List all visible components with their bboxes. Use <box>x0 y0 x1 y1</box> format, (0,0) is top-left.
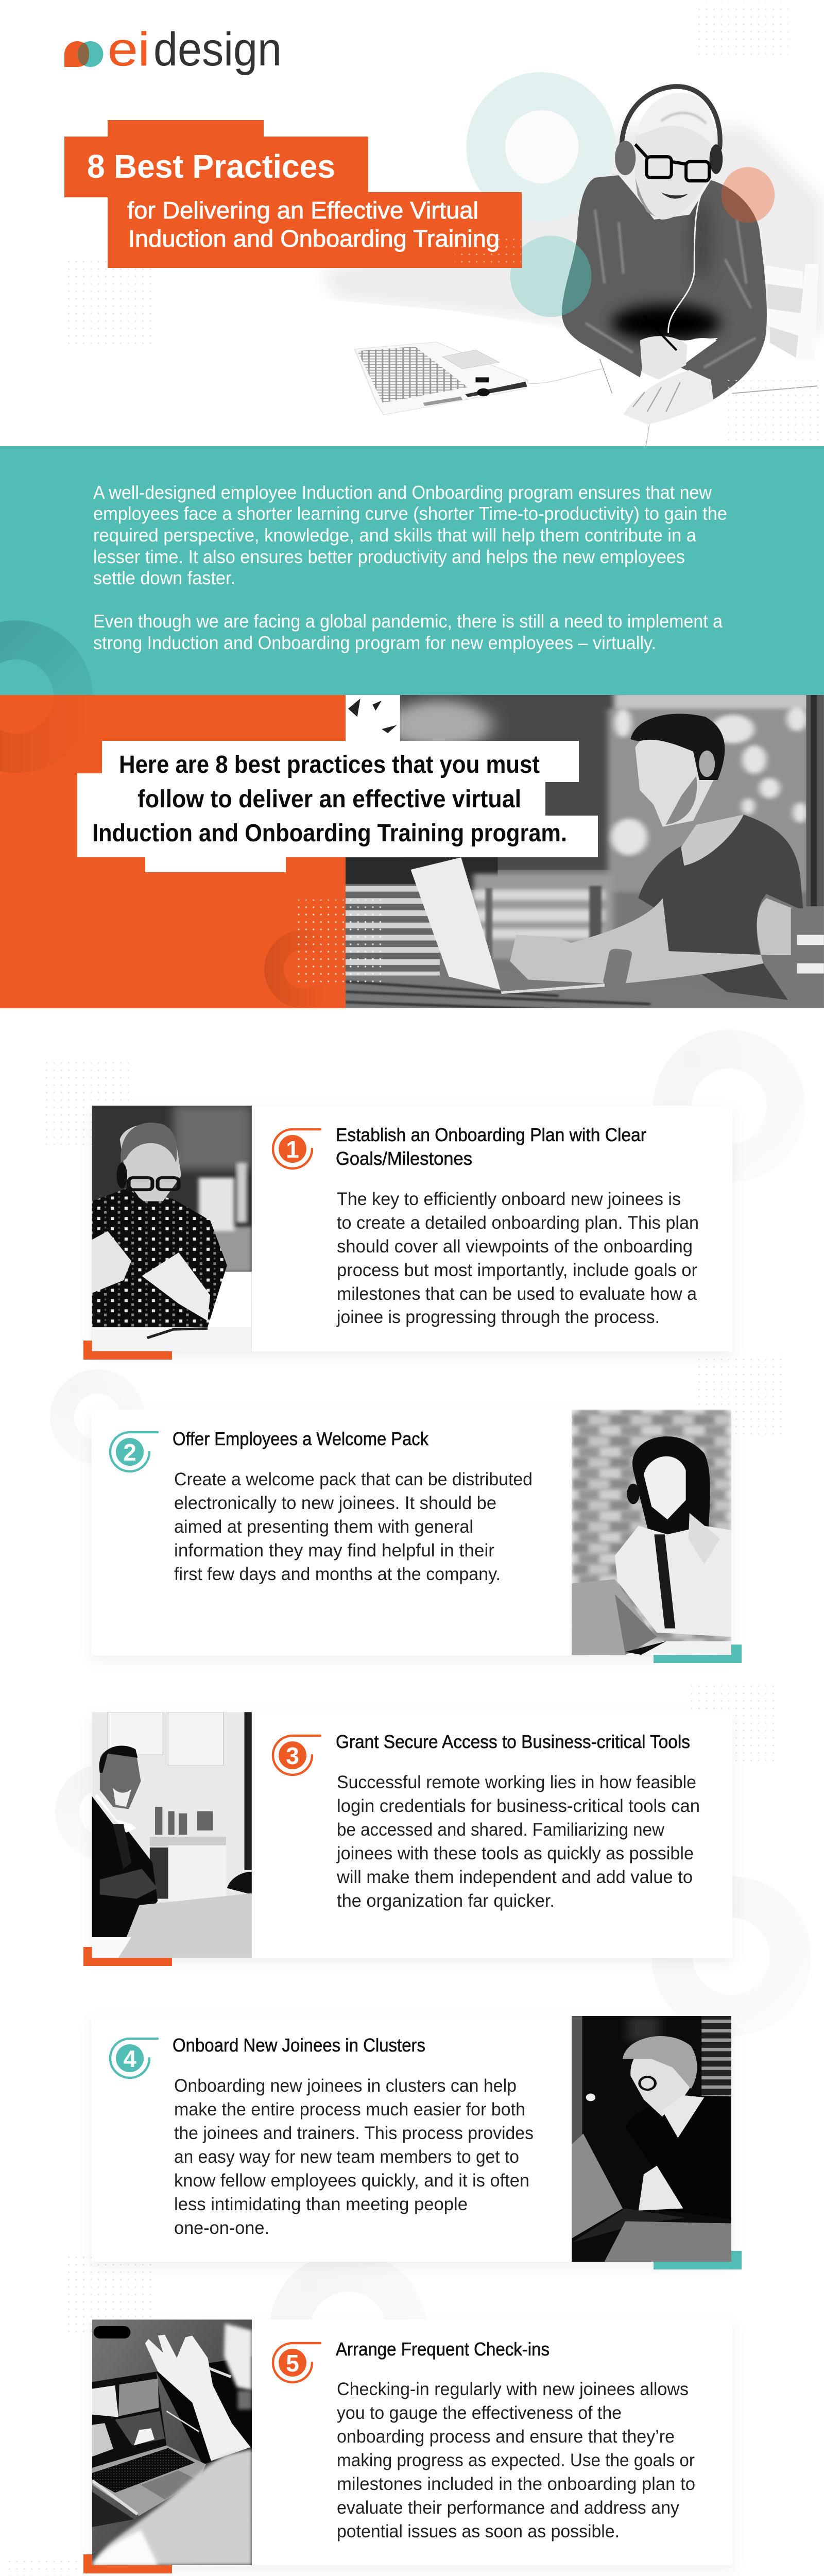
practice 4 text <box>174 2076 534 2238</box>
hero photo: woman with headset at laptop <box>288 72 824 448</box>
practice 5 text: onboarding process and ensure that they’re <box>337 2427 675 2447</box>
panel: practice 3 <box>83 1712 732 1966</box>
practice 2 badge: 2 <box>123 1439 136 1466</box>
intro paragraph 2: strong Induction and Onboarding program for new employees – virtually. <box>93 632 656 653</box>
panel: practice 2 <box>92 1409 742 1663</box>
practice 3 text: will make them independent and add value to <box>336 1867 693 1887</box>
logo: eidesign: ei <box>108 23 150 76</box>
practice 4 text: know fellow employees quickly, and it is often <box>174 2171 529 2191</box>
practice 1 text <box>336 1189 699 1327</box>
intro paragraph 1: employees face a shorter learning curve (shorter Time-to-productivity) to gain the <box>93 503 727 524</box>
practice 4 text: less intimidating than meeting people <box>174 2194 468 2214</box>
title block <box>64 120 522 268</box>
intro paragraph 1: settle down faster. <box>93 567 235 588</box>
practice 2 text <box>174 1469 533 1584</box>
callout: 8 best practices statement: Here are 8 best practices that you must <box>119 751 540 778</box>
practice 4 text: Onboarding new joinees in clusters can help <box>174 2076 517 2096</box>
title line 3: Induction and Onboarding Training <box>128 225 500 252</box>
practice 4 text: the joinees and trainers. This process provides <box>174 2123 534 2143</box>
practice 2 text: aimed at presenting them with general <box>174 1517 473 1537</box>
photo: man in black t-shirt with laptop <box>572 2016 731 2262</box>
practice 1 text: process but most importantly, include goals or <box>337 1260 697 1280</box>
practice 2 badge <box>110 1432 158 1471</box>
practice 1 text: should cover all viewpoints of the onboarding <box>337 1236 693 1257</box>
photo: man typing on laptop <box>345 690 824 1016</box>
panel: orange banner with photo <box>0 695 824 1008</box>
practice 5 badge: 5 <box>286 2350 299 2377</box>
practice 5 heading: Arrange Frequent Check-ins <box>336 2338 550 2360</box>
practice 1 text: joinee is progressing through the process. <box>336 1307 660 1327</box>
practice 4 text: make the entire process much easier for both <box>174 2099 525 2120</box>
practice 3 text: be accessed and shared. Familiarizing new <box>337 1820 665 1840</box>
intro paragraph 1: lesser time. It also ensures better productivity and helps the new employees <box>93 546 685 567</box>
practice 1 badge <box>273 1129 320 1168</box>
practice 2 text: Create a welcome pack that can be distributed <box>174 1469 533 1489</box>
practice 5 badge <box>273 2343 320 2382</box>
photo: video call on laptop with raised hand <box>92 2319 252 2565</box>
intro paragraph 2 <box>93 611 723 653</box>
callout: 8 best practices statement: follow to deliver an effective virtual <box>138 786 521 813</box>
practice 1 text: milestones that can be used to evaluate how a <box>337 1284 697 1304</box>
practice 4 heading: Onboard New Joinees in Clusters <box>173 2035 425 2056</box>
practice 4 badge: 4 <box>123 2045 136 2072</box>
intro paragraph 1 <box>93 482 727 588</box>
practice 3 heading: Grant Secure Access to Business-critical Tools <box>336 1731 690 1752</box>
practice 5 text: you to gauge the effectiveness of the <box>337 2403 622 2423</box>
practice 5 text: milestones included in the onboarding plan to <box>337 2474 695 2494</box>
intro paragraph 2: Even though we are facing a global pandemic, there is still a need to implement a <box>93 611 723 632</box>
practice 3 text: joinees with these tools as quickly as possible <box>336 1843 694 1863</box>
panel: practice 5 <box>83 2319 732 2573</box>
callout: 8 best practices statement: Induction and Onboarding Training program. <box>92 820 567 847</box>
photo: woman with headset against brick wall <box>572 1409 731 1655</box>
practice 5 text: making progress as expected. Use the goals or <box>337 2450 695 2470</box>
practice 3 badge: 3 <box>286 1742 299 1769</box>
practice 4 badge <box>110 2039 158 2078</box>
logo: eidesign <box>64 23 282 76</box>
title line 1: 8 Best Practices <box>87 148 335 185</box>
intro paragraph 1: A well-designed employee Induction and Onboarding program ensures that new <box>93 482 712 503</box>
photo: man in suit in kitchen <box>92 1712 252 1958</box>
practice 1 heading <box>336 1124 646 1169</box>
panel: introduction <box>0 446 824 695</box>
practice 5 text: potential issues as soon as possible. <box>337 2521 620 2541</box>
panel: practice 4 <box>92 2016 742 2269</box>
practice 2 text: first few days and months at the company. <box>174 1564 501 1584</box>
practice 1 text: to create a detailed onboarding plan. This plan <box>337 1213 699 1233</box>
practice 1 heading: Goals/Milestones <box>336 1148 472 1169</box>
practice 1 text: The key to efficiently onboard new joinees is <box>337 1189 681 1209</box>
practice 5 text <box>337 2379 695 2541</box>
photo: man with headset in plaid shirt <box>92 1106 252 1351</box>
practice 3 text: Successful remote working lies in how feasible <box>337 1772 696 1792</box>
practice 3 text <box>336 1772 700 1911</box>
practice 3 badge <box>273 1736 320 1775</box>
practice 3 text: the organization far quicker. <box>337 1891 555 1911</box>
practice 4 text: one-on-one. <box>174 2218 269 2238</box>
panel: practice 1 <box>83 1106 732 1360</box>
callout: 8 best practices statement <box>77 741 598 872</box>
intro paragraph 1: required perspective, knowledge, and skills that will help them contribute in a <box>93 524 697 546</box>
practice 3 text: login credentials for business-critical tools can <box>337 1796 700 1816</box>
title line 2: for Delivering an Effective Virtual <box>127 197 478 224</box>
practice 2 text: information they may find helpful in their <box>174 1540 494 1561</box>
logo mark <box>64 41 103 67</box>
practice 5 text: Checking-in regularly with new joinees allows <box>337 2379 689 2399</box>
practice 5 text: evaluate their performance and address any <box>337 2498 679 2518</box>
logo: eidesign: design <box>153 23 282 76</box>
practice 1 heading: Establish an Onboarding Plan with Clear <box>336 1124 646 1145</box>
practice 2 heading: Offer Employees a Welcome Pack <box>173 1428 429 1449</box>
practice 1 badge: 1 <box>286 1136 299 1163</box>
practice 4 text: an easy way for new team members to get to <box>174 2147 519 2167</box>
practice 2 text: electronically to new joinees. It should be <box>174 1493 496 1513</box>
